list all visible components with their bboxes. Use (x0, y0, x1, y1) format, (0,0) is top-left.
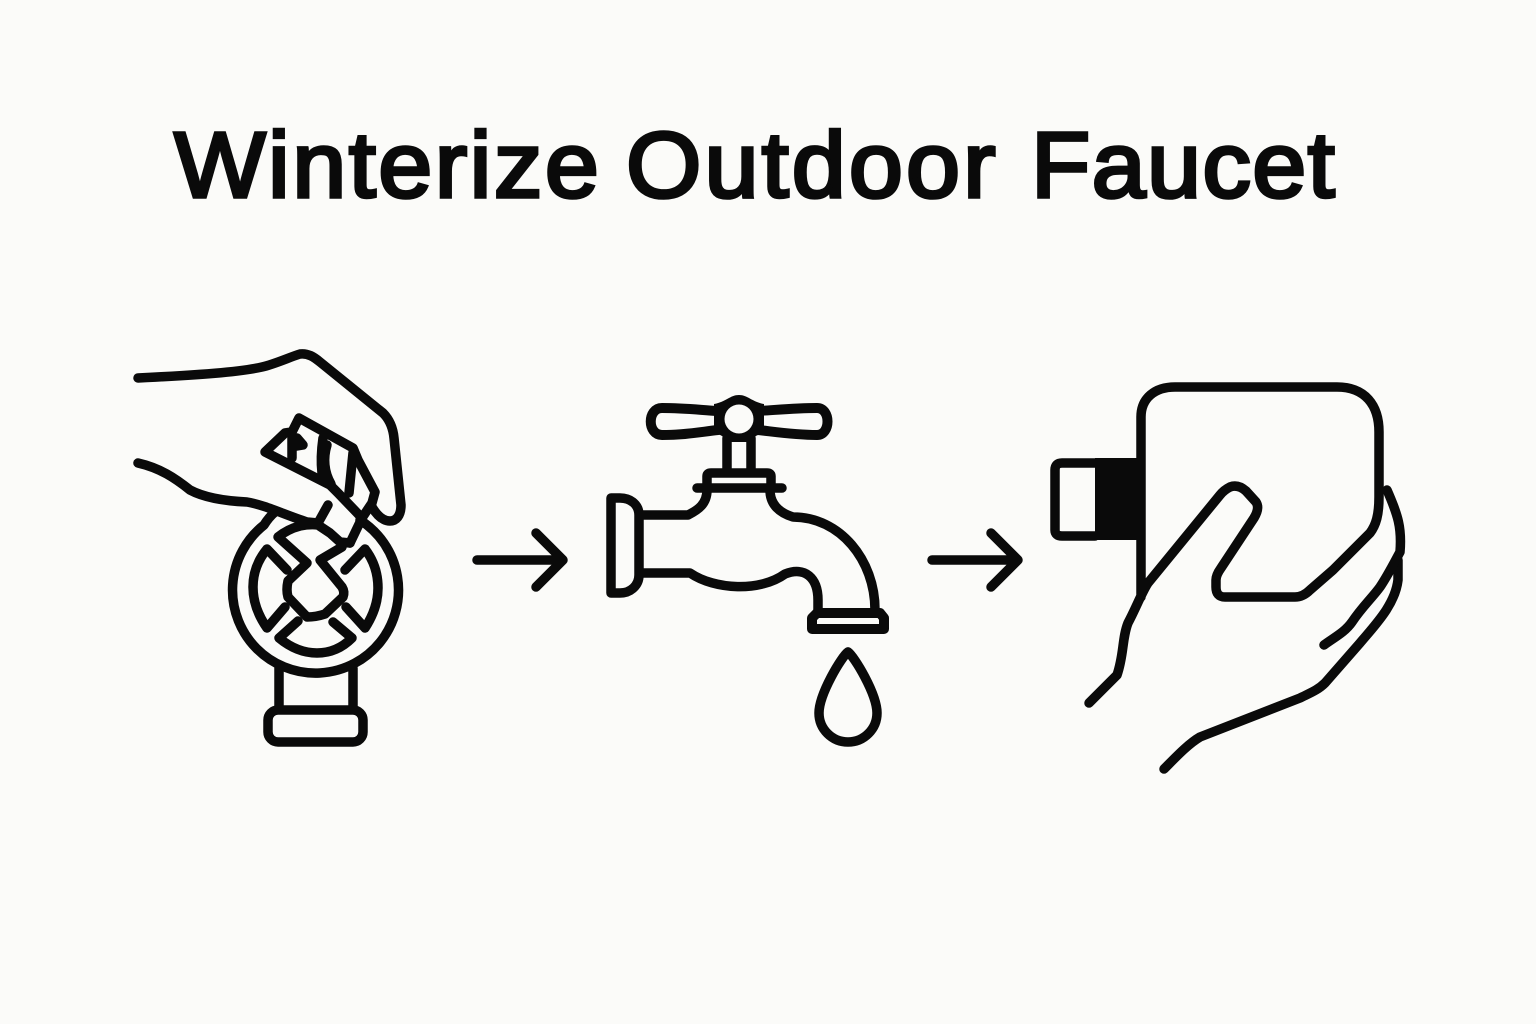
faucet body (643, 490, 875, 612)
icon: open faucet with drip (611, 395, 884, 742)
title: Winterize (174, 114, 602, 218)
cover cap outline (1055, 463, 1095, 536)
handle hub (714, 395, 764, 442)
curled fingers (1324, 490, 1400, 645)
valve pipe stem (279, 668, 353, 708)
valve inner segments (253, 549, 378, 653)
valve outer ring (233, 512, 399, 673)
gripped fingers (265, 418, 375, 543)
cover cap dark band (1095, 458, 1141, 540)
spout tip (812, 613, 884, 629)
handle stem (727, 438, 751, 472)
title: Faucet (1031, 114, 1336, 218)
valve center hub (278, 525, 350, 617)
handle paddles (651, 408, 828, 435)
wall flange (611, 498, 639, 593)
cover body with thumb (1089, 387, 1379, 703)
arrow 1 (477, 533, 563, 587)
finger detail lines (292, 434, 353, 493)
water drop (819, 652, 877, 742)
collar (697, 473, 782, 488)
hand lower thumb outline (138, 463, 328, 523)
valve base cap (268, 710, 363, 742)
icon: hand holding insulated cover (1055, 387, 1400, 769)
title: Outdoor (626, 114, 999, 218)
hand upper arm and fingers outline (138, 354, 401, 521)
icon: hand turning off shutoff valve (138, 354, 401, 742)
arrow 2 (932, 533, 1018, 587)
palm edge (1164, 560, 1398, 769)
